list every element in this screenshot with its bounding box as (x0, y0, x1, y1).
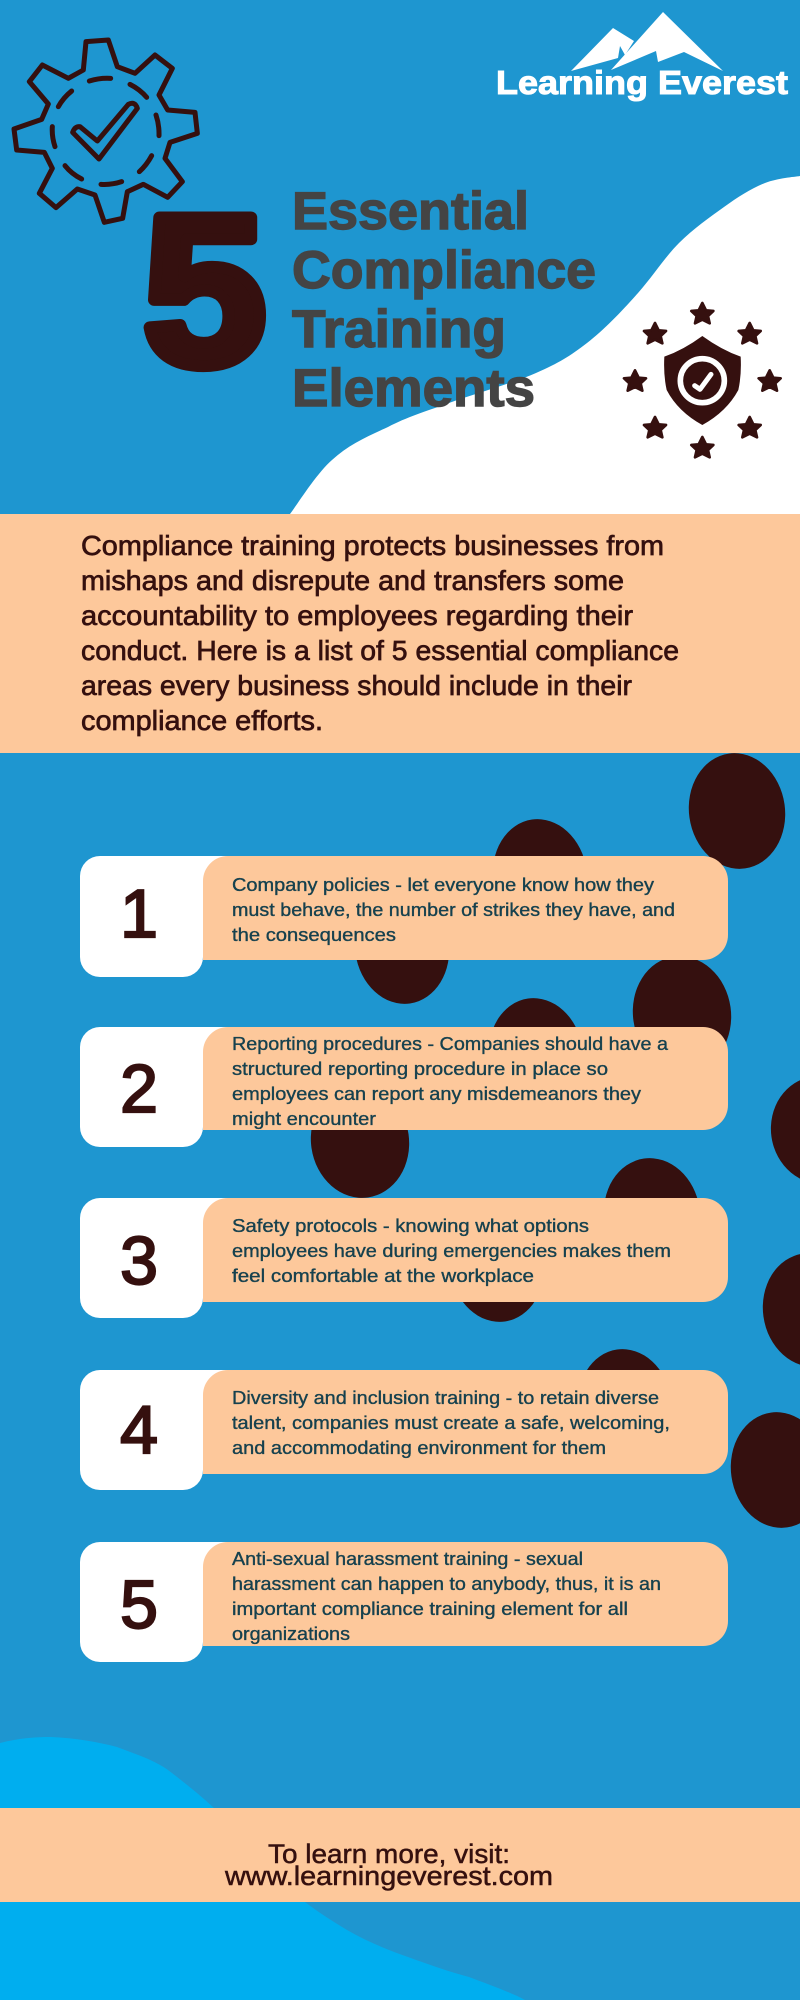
title: Training (292, 300, 506, 359)
title (292, 182, 596, 418)
footer text (224, 1839, 553, 1891)
card 3: safety protocols (80, 1198, 728, 1318)
card 5: anti-sexual harassment: harassment can happen to anybody, thus, it is an (232, 1574, 661, 1594)
title: Elements (292, 359, 535, 418)
card 4: diversity and inclusion: talent, companies must create a safe, welcoming, (232, 1413, 670, 1433)
footer text: To learn more, visit: (268, 1839, 510, 1869)
card 4: diversity and inclusion (80, 1370, 728, 1490)
intro text: Compliance training protects businesses from (81, 530, 664, 561)
card 1: company policies: must behave, the number of strikes they have, and (232, 900, 675, 920)
card 5: anti-sexual harassment (80, 1542, 728, 1662)
card 4: diversity and inclusion: 4 (120, 1392, 158, 1468)
card 1: company policies (80, 856, 728, 977)
card 2: reporting procedures: employees can report any misdemeanors they (232, 1084, 641, 1104)
card 5: anti-sexual harassment: 5 (120, 1567, 158, 1643)
title: Essential (292, 182, 529, 241)
card 2: reporting procedures: structured reporting procedure in place so (232, 1059, 608, 1079)
intro text: compliance efforts. (81, 705, 323, 736)
big number 5: 5 (143, 172, 266, 410)
intro text: mishaps and disrepute and transfers some (81, 565, 624, 596)
white wave background (290, 176, 800, 514)
card 3: safety protocols: Safety protocols - knowing what options (232, 1216, 589, 1236)
card 1: company policies: Company policies - let everyone know how they (232, 875, 654, 895)
card 5: anti-sexual harassment: important compliance training element for all (232, 1599, 628, 1619)
card 5: anti-sexual harassment: Anti-sexual harassment training - sexual (232, 1549, 583, 1569)
card 3: safety protocols: 3 (120, 1223, 158, 1299)
card 1: company policies: 1 (120, 876, 158, 952)
card 4: diversity and inclusion: Diversity and inclusion training - to retain diverse (232, 1388, 659, 1408)
card 5: anti-sexual harassment: organizations (232, 1624, 350, 1644)
footer text: www.learningeverest.com (224, 1861, 553, 1891)
title: Compliance (292, 241, 596, 300)
panel: intro band (0, 514, 800, 753)
intro text: conduct. Here is a list of 5 essential compliance (81, 635, 679, 666)
card 2: reporting procedures (80, 1027, 728, 1147)
icon: shield with stars (624, 303, 781, 457)
panel: footer band (0, 1808, 800, 1902)
logo: Learning Everest: Learning Everest (496, 64, 788, 101)
icon: gear with checkmark (14, 40, 197, 222)
card 1: company policies: the consequences (232, 925, 396, 945)
light blue corner shape (0, 1737, 525, 2000)
card 2: reporting procedures: might encounter (232, 1109, 376, 1129)
intro text: accountability to employees regarding their (81, 600, 633, 631)
card 3: safety protocols: employees have during emergencies makes them (232, 1241, 671, 1261)
intro text: areas every business should include in their (81, 670, 632, 701)
blobs: dark decorative ovals (304, 747, 800, 1534)
intro text (81, 530, 679, 736)
logo: Learning Everest (496, 12, 788, 101)
card 2: reporting procedures: Reporting procedures - Companies should have a (232, 1034, 669, 1054)
card 2: reporting procedures: 2 (120, 1051, 158, 1127)
card 4: diversity and inclusion: and accommodating environment for them (232, 1438, 606, 1458)
card 3: safety protocols: feel comfortable at the workplace (232, 1266, 534, 1286)
